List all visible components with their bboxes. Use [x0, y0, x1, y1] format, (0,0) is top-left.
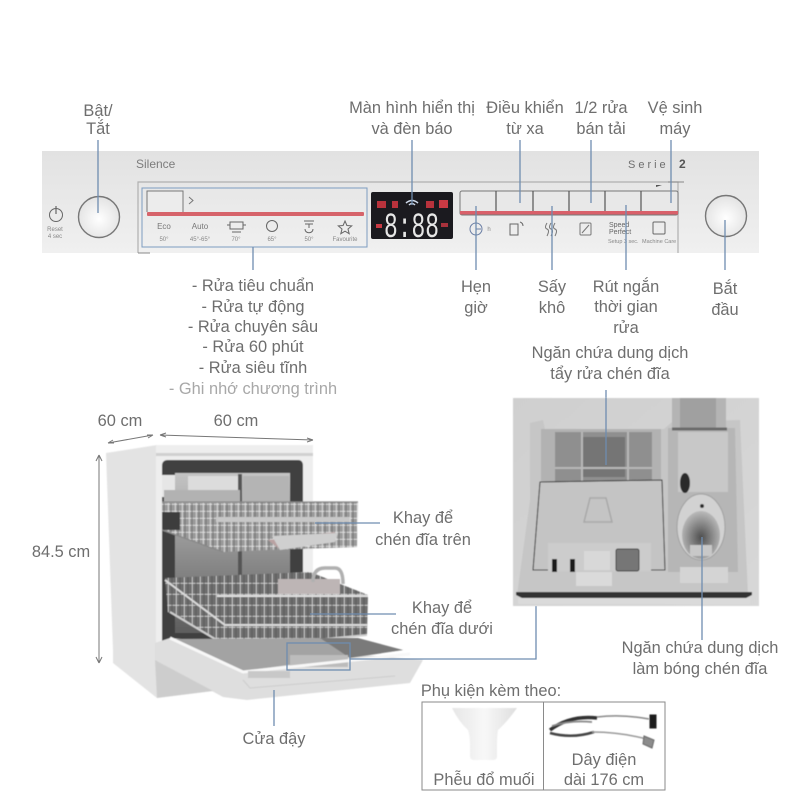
label: wash programs: - Ghi nhớ chương trình [169, 380, 337, 398]
label: drying [538, 278, 567, 317]
start knob [706, 196, 746, 236]
dishwasher illustration [106, 445, 423, 700]
door [155, 638, 423, 700]
program selector: 65° [267, 237, 277, 243]
leader lines: control panel [98, 140, 725, 270]
icon: power cord [550, 715, 656, 748]
icon: power reset: 4 sec [48, 234, 62, 240]
power knob [78, 196, 120, 238]
program selector: Eco [157, 222, 171, 231]
detergent lid [533, 480, 665, 570]
upper rack [162, 490, 358, 552]
label: rinse aid compartment [622, 639, 778, 678]
rinse aid well [677, 494, 725, 560]
program selector [142, 188, 367, 247]
function icons: Machine Care [642, 239, 676, 245]
label: remote control [486, 99, 564, 138]
label: upper rack [375, 509, 471, 549]
function icons: h [487, 227, 491, 233]
program selector: 50° [159, 237, 169, 243]
label: half load: bán tải [576, 120, 626, 138]
label: drying: Sấy [538, 278, 567, 296]
lower rack [165, 568, 368, 648]
label: display and indicators: Màn hình hiển thị [349, 99, 475, 117]
label: lower rack: Khay để [412, 599, 472, 617]
side panel [106, 445, 157, 698]
label: remote control: Điều khiển [486, 99, 564, 117]
label: depth: 60 cm [98, 412, 142, 430]
label: timer: Hẹn [461, 278, 491, 296]
program selector: Favourite [332, 237, 358, 243]
label: door: Cửa đậy [243, 730, 306, 748]
label: start: Bắt [713, 279, 738, 298]
icon: intensive pot [227, 222, 246, 232]
label: detergent compartment [532, 344, 688, 383]
label: lower rack [391, 599, 493, 638]
accessories heading: Phụ kiện kèm theo: [421, 682, 561, 700]
dispenser base [517, 420, 748, 595]
label: start [711, 279, 739, 319]
dispenser photo [513, 398, 759, 606]
control panel [42, 151, 759, 253]
brand number: 2 [679, 157, 686, 171]
label: cord [564, 751, 644, 789]
dimension arrows [96, 433, 313, 663]
label: drying: khô [539, 299, 565, 317]
label: height: 84.5 cm [32, 543, 90, 561]
label: speed perfect: Rút ngắn [593, 277, 659, 296]
icon: favourite star [338, 221, 352, 234]
label: half load: 1/2 rửa [575, 99, 628, 117]
label: wash programs: - Rửa 60 phút [202, 338, 304, 356]
label: upper rack: chén đĩa trên [375, 531, 471, 549]
function icons: Setup 3 sec. [608, 239, 639, 245]
label: power: Bật/ [83, 102, 113, 120]
detergent well [541, 429, 661, 484]
label: rinse aid compartment: làm bóng chén đĩa [633, 660, 768, 678]
display [371, 192, 453, 248]
label: wash programs [169, 277, 337, 398]
leader lines: dishwasher and dispenser [274, 390, 606, 726]
rinse aid column [668, 428, 738, 572]
label: wash programs: - Rửa tự động [201, 298, 305, 316]
label: wash programs: - Rửa chuyên sâu [188, 318, 318, 336]
label: machine clean [648, 99, 702, 138]
label: remote control: từ xa [506, 120, 545, 138]
icon: salt funnel [452, 708, 517, 760]
display: 8:88 [384, 208, 439, 248]
brand: Silence: Silence [136, 157, 176, 171]
icon: silent wash [304, 221, 314, 233]
label: detergent compartment: tẩy rửa chén đĩa [550, 365, 671, 383]
cavity [162, 460, 303, 645]
label: upper rack: Khay để [393, 509, 453, 527]
function icons: Speed [609, 222, 629, 229]
program selector: Auto [192, 222, 209, 231]
label: machine clean: Vệ sinh [648, 99, 702, 117]
front frame [156, 445, 313, 645]
plinth [155, 660, 213, 698]
label: timer: giờ [464, 299, 488, 317]
leader lines over dispenser photo [606, 398, 702, 640]
icon: power reset [47, 206, 63, 240]
label: funnel: Phễu đổ muối [433, 770, 535, 789]
icon: 60 minute timer [266, 220, 278, 232]
icon: power reset: Reset [47, 227, 63, 233]
program selector: 45°-65° [190, 237, 211, 243]
label: width: 60 cm [214, 412, 258, 430]
label: wash programs: - Rửa siêu tĩnh [199, 359, 307, 377]
label: start: đầu [711, 301, 739, 319]
label: power [83, 102, 113, 138]
label: speed perfect [593, 277, 659, 337]
function icons: Perfect [609, 229, 631, 236]
label: display and indicators: và đèn báo [371, 120, 453, 138]
label: half load [575, 99, 628, 138]
label: rinse aid compartment: Ngăn chứa dung dịch [622, 639, 778, 657]
label: speed perfect: rửa [613, 319, 640, 337]
function icons [470, 222, 676, 245]
label: speed perfect: thời gian [594, 298, 658, 316]
accessories table [422, 702, 665, 790]
label: lower rack: chén đĩa dưới [391, 620, 493, 638]
label: detergent compartment: Ngăn chứa dung dịch [532, 344, 688, 362]
label: wash programs: - Rửa tiêu chuẩn [192, 277, 314, 295]
label: machine clean: máy [660, 120, 691, 138]
program selector: 50° [304, 237, 314, 243]
function buttons [460, 185, 678, 215]
label: cord: Dây điện [572, 751, 636, 769]
program selector: 70° [231, 237, 241, 243]
brand: Serie 2: Serie [628, 159, 669, 171]
label: power: Tắt [86, 119, 110, 138]
label: timer [461, 278, 491, 317]
label: cord: dài 176 cm [564, 771, 644, 789]
label: display and indicators [349, 99, 475, 138]
